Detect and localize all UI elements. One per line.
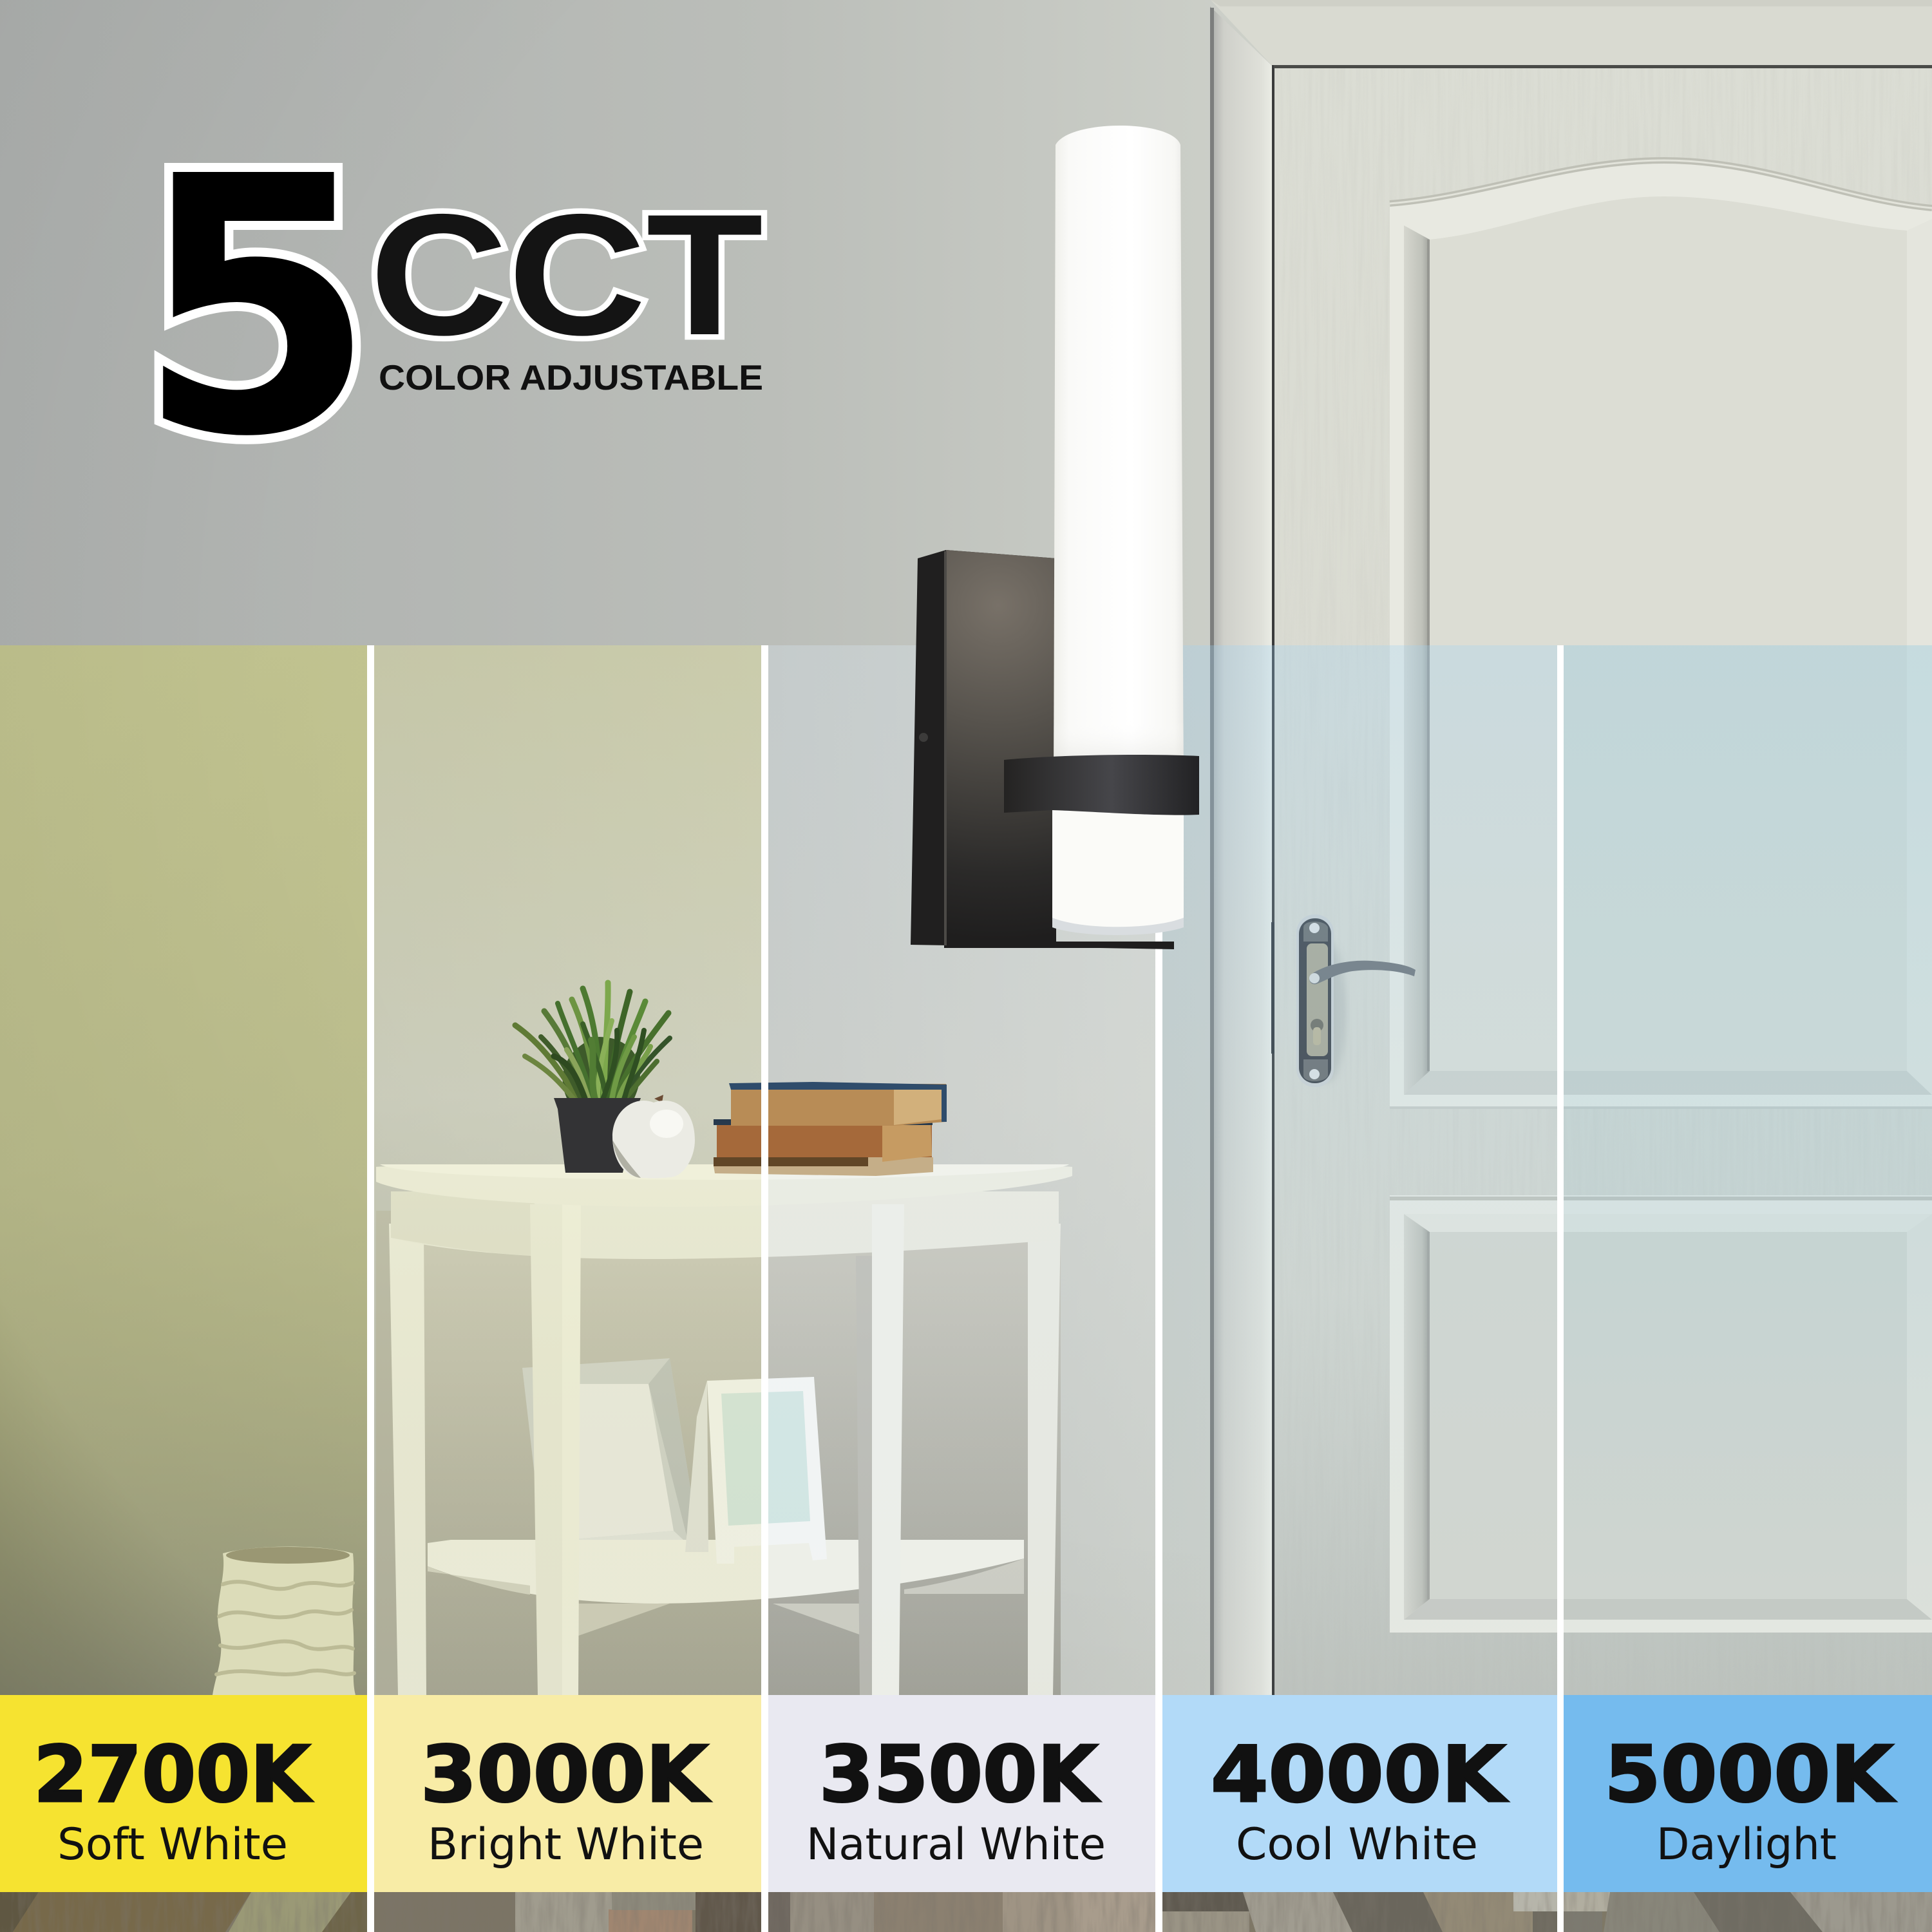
plant in pot — [515, 983, 670, 1173]
back legs — [389, 1224, 426, 1695]
label: 3000K Bright White — [374, 1695, 761, 1892]
console table — [376, 1164, 1072, 1695]
wood floor — [0, 1892, 1932, 1932]
label: 5000K Daylight: Daylight — [1656, 1819, 1837, 1870]
sconce back plate — [911, 550, 1174, 949]
label: 3500K Natural White: Natural White — [806, 1819, 1106, 1870]
color adjustable subtitle: COLOR ADJUSTABLE — [379, 357, 763, 397]
label: 2700K Soft White: Soft White — [57, 1819, 288, 1870]
sconce ring — [1004, 755, 1199, 815]
wall sconce — [911, 126, 1199, 949]
lower door panel — [1390, 1195, 1932, 1633]
picture frame white with glass — [685, 1377, 827, 1564]
label: 4000K Cool White — [1162, 1695, 1557, 1892]
latch strip — [1271, 922, 1274, 1054]
apron — [391, 1191, 1059, 1259]
door — [1271, 65, 1932, 1695]
label: 3000K Bright White: 3000K — [421, 1730, 711, 1820]
under-table shadow — [389, 1224, 1061, 1695]
shelf — [428, 1540, 1024, 1636]
door handle — [1296, 914, 1416, 1087]
colour temperature tints — [0, 645, 1932, 1695]
big numeral 5: 5 — [137, 101, 376, 514]
stack of books — [714, 1082, 947, 1176]
door trim — [1210, 0, 1932, 1695]
label: 3500K Natural White — [768, 1695, 1155, 1892]
label: 3000K Bright White: Bright White — [428, 1819, 704, 1870]
frosted glass tube — [1052, 126, 1184, 935]
label: 3500K Natural White: 3500K — [819, 1730, 1101, 1820]
label: 2700K Soft White: 2700K — [33, 1730, 313, 1820]
label: 4000K Cool White: 4000K — [1211, 1730, 1508, 1820]
label: 2700K Soft White — [0, 1695, 367, 1892]
front leg left — [530, 1204, 581, 1695]
title: 5 CCT Color Adjustable — [137, 101, 763, 514]
ceramic vase — [213, 1547, 355, 1695]
label: 5000K Daylight: 5000K — [1604, 1730, 1896, 1820]
CCT: CCT — [370, 178, 763, 371]
label: 4000K Cool White: Cool White — [1236, 1819, 1478, 1870]
ceramic apple — [612, 1095, 695, 1179]
table top — [376, 1164, 1072, 1207]
divider lines between temperature columns — [367, 645, 1564, 1932]
front leg right — [856, 1204, 904, 1695]
label: 5000K Daylight — [1564, 1695, 1932, 1892]
upper door panel — [1390, 160, 1932, 1109]
picture frame silver — [522, 1358, 701, 1568]
